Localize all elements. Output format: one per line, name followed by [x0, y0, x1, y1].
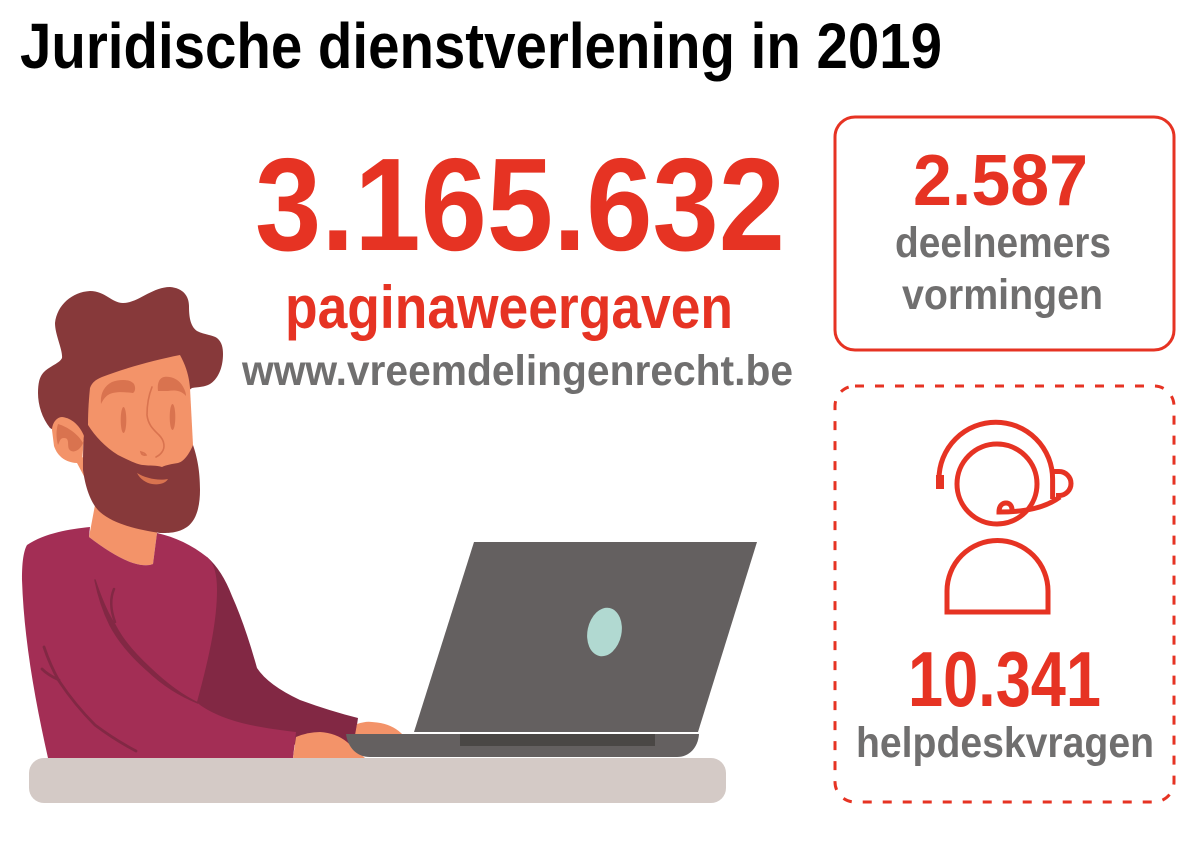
- panel: training participants: [835, 117, 1174, 350]
- face: [88, 355, 193, 470]
- ear: [52, 417, 84, 463]
- table: [29, 758, 726, 803]
- icon: helpdesk person with headset: [936, 422, 1071, 612]
- beard: [83, 425, 200, 533]
- page views label: paginaweergaven: [285, 274, 733, 341]
- website: www.vreemdelingenrecht.be: [241, 347, 793, 395]
- participants label line 2: vormingen: [902, 271, 1103, 319]
- title: Juridische dienstverlening in 2019: [20, 10, 942, 82]
- laptop base: [346, 734, 699, 757]
- laptop: [346, 542, 757, 757]
- head: [38, 287, 223, 533]
- panel: page views: [241, 131, 793, 395]
- panel: helpdesk: [835, 386, 1174, 802]
- participants number: 2.587: [913, 141, 1088, 221]
- dashed box: [835, 386, 1174, 802]
- helpdesk number: 10.341: [908, 635, 1101, 723]
- smile: [137, 473, 168, 484]
- solid box: [835, 117, 1174, 350]
- laptop logo: [583, 605, 626, 659]
- page views number: 3.165.632: [255, 131, 785, 278]
- hands: [293, 722, 403, 758]
- laptop screen: [414, 542, 757, 732]
- helpdesk label: helpdeskvragen: [856, 719, 1154, 767]
- eyebrows: [101, 377, 186, 404]
- eyes: [121, 404, 175, 433]
- sweater: [22, 527, 358, 758]
- participants label line 1: deelnemers: [895, 219, 1111, 267]
- illustration: man at laptop: [22, 287, 757, 803]
- neck: [77, 450, 160, 565]
- hair: [38, 287, 223, 440]
- inner ear: [56, 424, 83, 451]
- nose: [141, 387, 164, 457]
- laptop slot: [460, 734, 655, 746]
